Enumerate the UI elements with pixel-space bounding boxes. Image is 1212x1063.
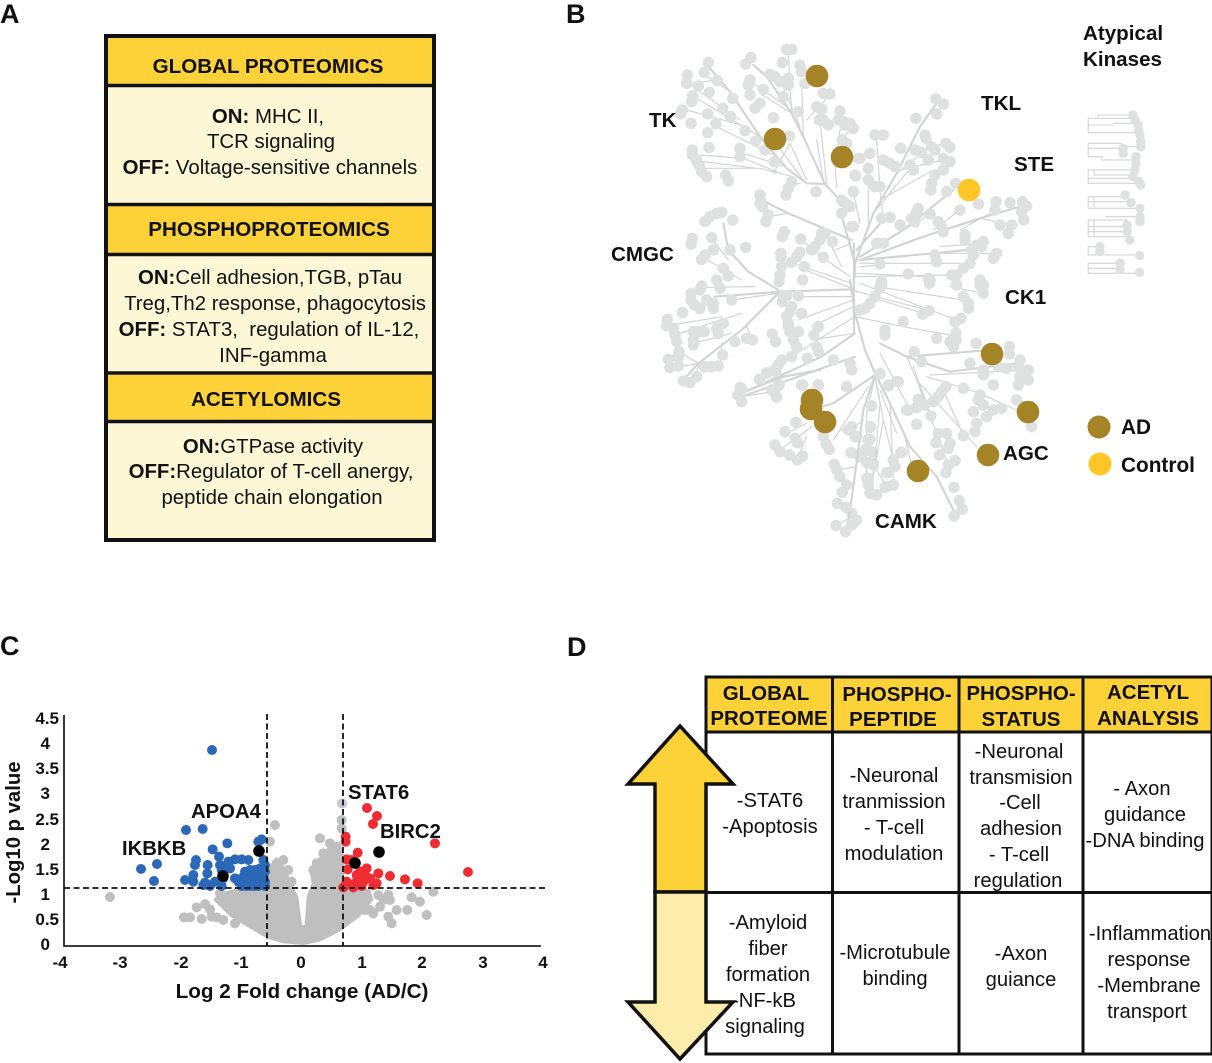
y axis ticks: 2 [41, 835, 50, 854]
up arrow [628, 726, 733, 892]
text: acetylomics findings: ON:GTPase activity [183, 436, 364, 458]
text: phosphoproteomics findings [119, 267, 426, 367]
kinase family labels: Atypical [1083, 22, 1163, 45]
panel A: omics summary table [106, 36, 434, 540]
x axis ticks: -3 [112, 953, 128, 972]
x axis ticks: -1 [233, 953, 249, 972]
text: phosphoproteomics findings: INF-gamma [219, 345, 327, 367]
table headers: PEPTIDE [849, 708, 937, 731]
heading: global proteomics: GLOBAL PROTEOMICS [153, 55, 383, 78]
table headers: STATUS [982, 708, 1060, 731]
lower row cells: binding [862, 968, 928, 990]
gene labels: APOA4 [191, 801, 262, 823]
atypical kinases mini tree [1088, 115, 1141, 273]
CAMK lower-left branch [740, 370, 907, 532]
y axis ticks: 0.5 [35, 910, 59, 929]
x axis ticks: 2 [417, 953, 427, 972]
gene labels [122, 782, 441, 860]
text: global proteomics findings: OFF: Voltage-sensitive channels [123, 157, 417, 179]
panel D: summary table [706, 676, 1212, 1054]
y axis ticks: 4.5 [35, 709, 59, 728]
kinase family labels: Kinases [1083, 48, 1162, 71]
lower row cells: guiance [986, 969, 1056, 991]
x axis ticks: 1 [357, 953, 367, 972]
upper row cells: - T-cell [864, 817, 924, 839]
lower row cells: -Membrane [1097, 975, 1201, 997]
lower row cells: -Inflammation [1089, 923, 1211, 945]
kinase family labels [611, 22, 1163, 533]
text: global proteomics findings: TCR signaling [207, 131, 335, 153]
kinase family labels: TK [649, 109, 677, 132]
kinase family labels: CAMK [875, 510, 937, 533]
down arrow [628, 892, 733, 1059]
y axis ticks: 0 [41, 935, 50, 954]
text: phosphoproteomics findings: OFF: STAT3, regulation of IL-12, [119, 319, 419, 341]
CMGC branch [667, 202, 855, 397]
text: global proteomics findings [123, 106, 417, 179]
blue down-regulated points [141, 750, 265, 886]
kinase family labels: AGC [1003, 442, 1049, 465]
legend: AD [1121, 416, 1151, 439]
gene labels: BIRC2 [380, 821, 441, 843]
upper row cells: regulation [974, 870, 1062, 892]
lower row cells: -Amyloid [729, 912, 807, 934]
text: acetylomics findings: peptide chain elongation [161, 487, 383, 509]
panel letter D: D [567, 632, 586, 662]
panel C: volcano plot [3, 709, 548, 1003]
legend [1088, 416, 1195, 477]
AD kinase markers [764, 65, 1039, 482]
panel letter C: C [0, 631, 20, 661]
text: acetylomics findings: OFF:Regulator of T-cell anergy, [129, 461, 413, 483]
x axis title: Log 2 Fold change (AD/C) [176, 980, 428, 1003]
y axis ticks: 2.5 [35, 810, 59, 829]
y axis ticks: 3 [41, 784, 50, 803]
x axis ticks: -2 [173, 953, 189, 972]
kinase family labels: TKL [981, 92, 1021, 115]
upper row cells: guidance [1104, 804, 1186, 826]
table headers [710, 681, 1199, 731]
panel D: up/down arrow [628, 726, 733, 1059]
text: acetylomics findings [129, 436, 413, 509]
upper row cells: -Cell [999, 792, 1041, 814]
text: phosphoproteomics findings: Treg,Th2 response, phagocytosis [124, 293, 426, 315]
kinase family labels: STE [1014, 153, 1054, 176]
text: phosphoproteomics findings: ON:Cell adhesion,TGB, pTau [138, 267, 402, 289]
table headers: ACETYL [1107, 681, 1189, 704]
upper row cells [722, 741, 1204, 892]
lower row cells: -Axon [995, 943, 1047, 965]
black highlighted points [217, 845, 385, 882]
x axis ticks: -4 [52, 953, 68, 972]
kinase family labels: CMGC [611, 243, 674, 266]
lower row cells: fiber [748, 938, 788, 960]
y axis ticks: 4 [41, 734, 51, 753]
text: global proteomics findings: ON: MHC II, [212, 106, 324, 128]
gene labels: STAT6 [348, 782, 409, 804]
upper row cells: -Apoptosis [722, 816, 818, 838]
table headers: ANALYSIS [1097, 707, 1199, 730]
gene labels: IKBKB [122, 838, 186, 860]
upper row cells: transmision [969, 767, 1073, 789]
lower row cells: -Microtubule [839, 942, 951, 964]
upper row cells: adhesion [980, 818, 1062, 840]
table headers: PROTEOME [710, 707, 828, 730]
upper row cells: -Neuronal [850, 765, 938, 787]
upper row cells: - Axon [1113, 778, 1171, 800]
gray non-significant points [110, 803, 433, 945]
table headers: PHOSPHO- [842, 683, 952, 706]
upper row cells: -DNA binding [1086, 830, 1204, 852]
y axis ticks: 1.5 [35, 860, 59, 879]
panel B: kinome tree [611, 22, 1195, 533]
AGC branch [850, 280, 1032, 521]
heading: phosphoproteomics: PHOSPHOPROTEOMICS [148, 218, 390, 241]
y axis ticks [35, 709, 59, 954]
x axis ticks: 0 [296, 953, 306, 972]
legend: Control [1121, 454, 1195, 477]
table headers: PHOSPHO- [966, 682, 1076, 705]
y axis ticks: 1 [41, 885, 50, 904]
lower row cells: response [1107, 949, 1191, 971]
TK branch [681, 49, 858, 205]
heading: acetylomics: ACETYLOMICS [191, 388, 341, 411]
red up-regulated points [343, 808, 468, 887]
control kinase marker [958, 179, 980, 201]
upper row cells: -STAT6 [737, 790, 803, 812]
TKL, STE and CK1 branches [840, 99, 1027, 288]
x axis ticks: 3 [478, 953, 488, 972]
table headers: GLOBAL [723, 682, 809, 705]
y axis ticks: 3.5 [35, 759, 59, 778]
lower row cells [725, 912, 1211, 1038]
y axis title: -Log10 p value [3, 762, 25, 904]
axes and thresholds [64, 714, 548, 946]
upper row cells: modulation [845, 843, 943, 865]
upper row cells: - T-cell [989, 844, 1049, 866]
lower row cells: transport [1107, 1001, 1187, 1023]
x axis ticks [52, 953, 548, 972]
lower row cells: formation [726, 964, 810, 986]
lower row cells: signaling [725, 1016, 805, 1038]
upper row cells: -Neuronal [975, 741, 1063, 763]
upper row cells: tranmission [842, 791, 946, 813]
x axis ticks: 4 [538, 953, 548, 972]
lower row cells: -NF-kB [732, 990, 796, 1012]
kinase family labels: CK1 [1005, 286, 1046, 309]
